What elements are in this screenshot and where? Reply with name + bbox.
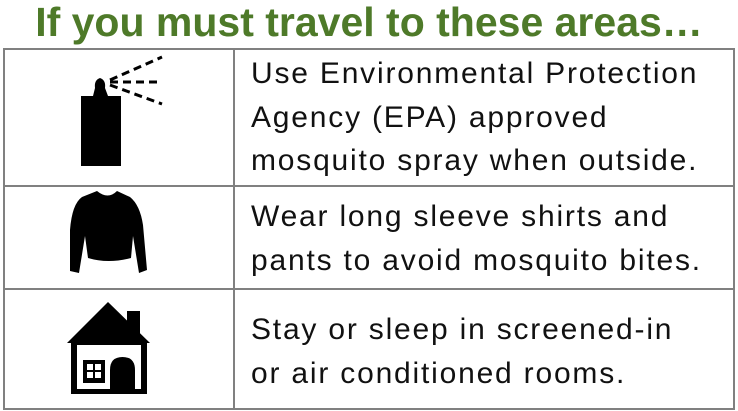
text: row 3: Stay or sleep in screened-in <box>251 313 673 346</box>
icon: house <box>67 302 150 394</box>
icon: spray can <box>81 57 162 166</box>
text: row 1 <box>251 57 698 177</box>
text: row 3 <box>251 313 673 390</box>
text: row 3: or air conditioned rooms. <box>251 356 626 390</box>
text: row 1: Use Environmental Protection <box>251 57 698 90</box>
icon: long sleeve shirt <box>70 191 147 273</box>
text: row 2: Wear long sleeve shirts and <box>251 200 669 233</box>
text: row 2 <box>251 200 702 276</box>
title: If you must travel to these areas… <box>35 0 703 45</box>
text: row 1: mosquito spray when outside. <box>251 144 698 177</box>
text: row 2: pants to avoid mosquito bites. <box>251 244 702 276</box>
text: row 1: Agency (EPA) approved <box>251 100 608 134</box>
